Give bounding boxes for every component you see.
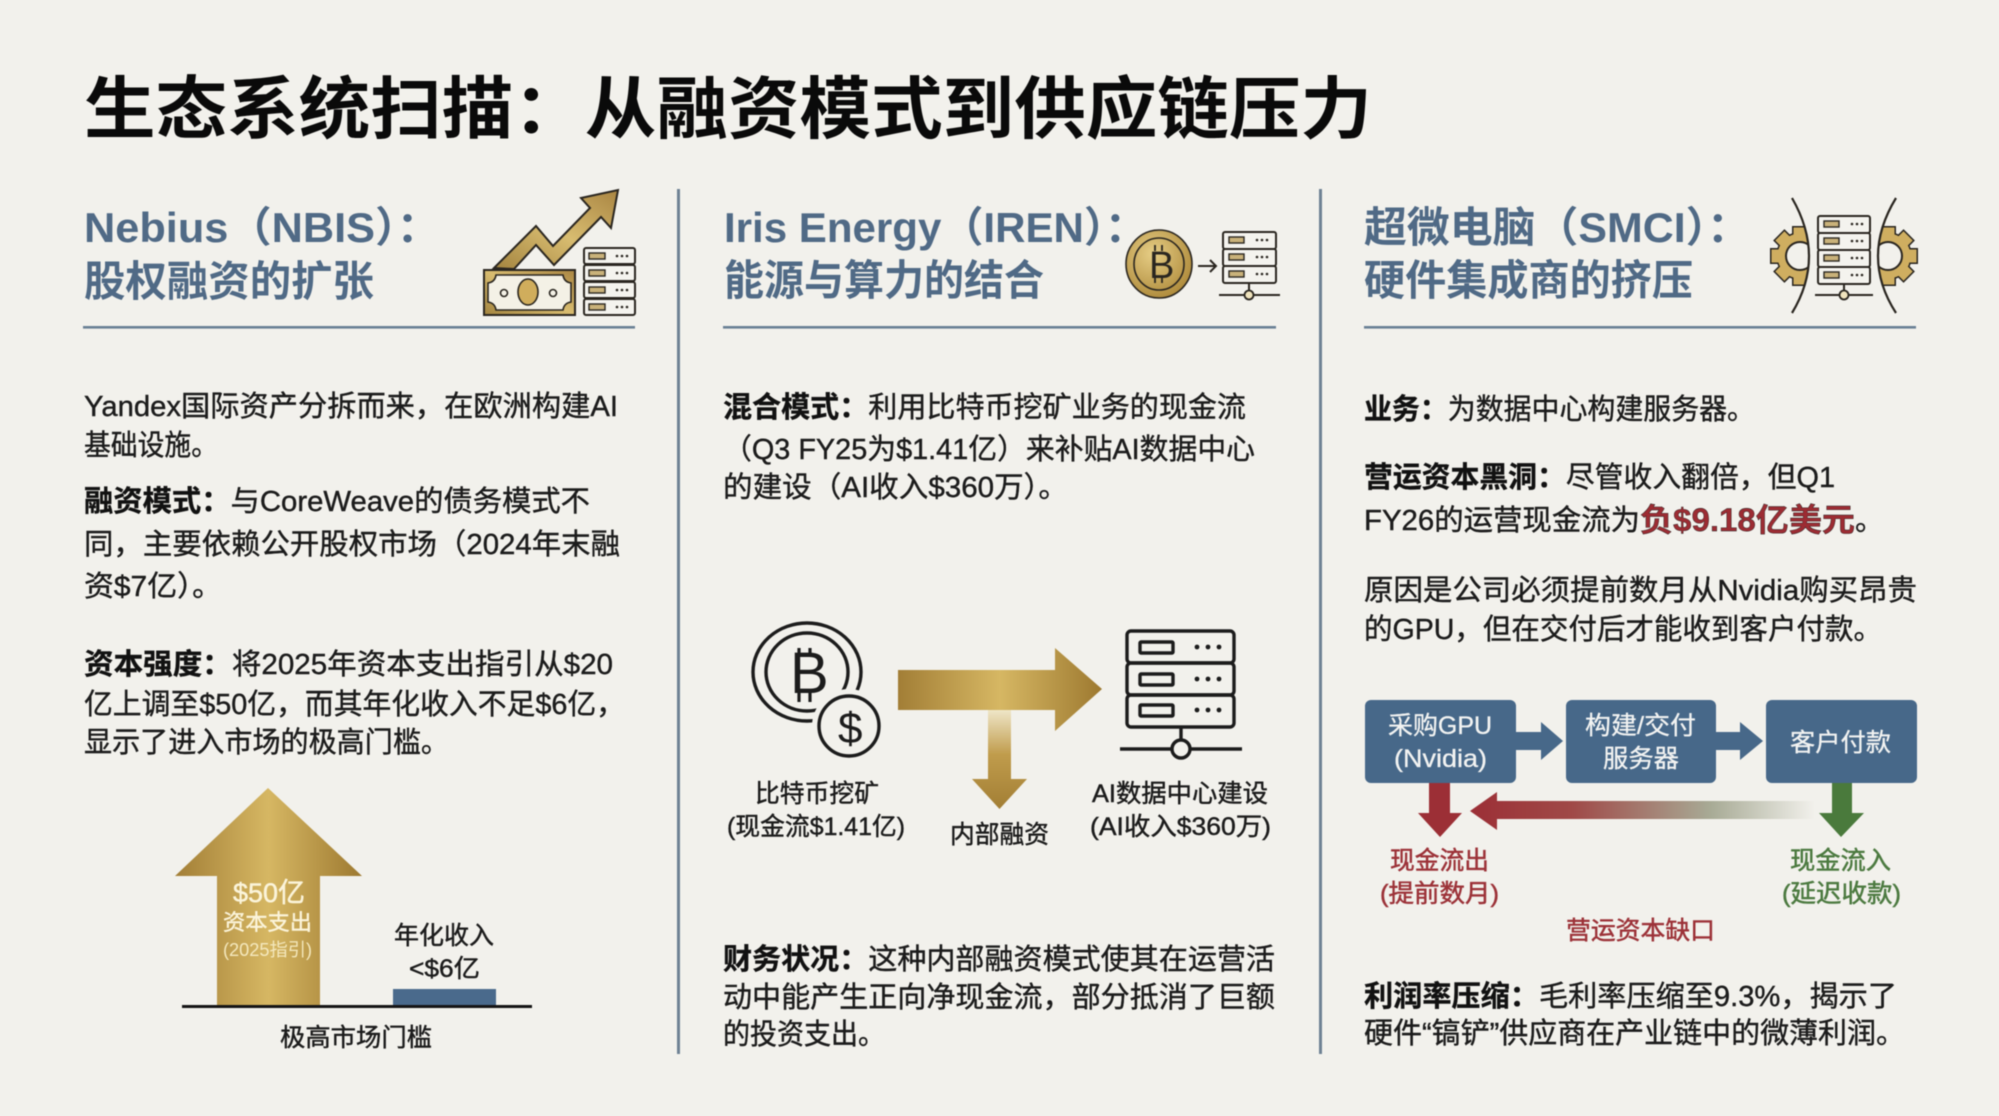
title: 生态系统扫描：从融资模式到供应链压力	[84, 72, 1372, 148]
text block: hybrid model: （Q3 FY25为$1.41亿）来补贴AI数据中心	[723, 433, 1255, 466]
arrow: internal financing down	[972, 710, 1027, 809]
arrow: step two to three	[1716, 722, 1763, 760]
panel: Iris Energy	[723, 204, 1280, 1051]
revenue bar: 年化收入	[394, 922, 494, 950]
box: build and deliver: 服务器	[1603, 745, 1679, 773]
icon: bitcoin coin to server	[1126, 230, 1280, 300]
label: cash outflow: (提前数月)	[1380, 880, 1499, 908]
text block: Super Micro body: 。	[1855, 505, 1884, 537]
text block: margin compression: 硬件“镐铲”供应商在产业链中的微薄利润。	[1364, 1017, 1905, 1050]
revenue bar: <$6亿	[409, 955, 480, 983]
capex arrow: $50亿	[233, 878, 305, 908]
highlighted figure: 负$9.18亿美元	[1640, 502, 1855, 538]
label: cash outflow	[1380, 847, 1499, 908]
text block: Super Micro body	[1364, 393, 1917, 646]
box: customer payment: 客户付款	[1790, 729, 1891, 757]
label: bitcoin mining: (现金流$1.41亿)	[727, 813, 905, 841]
text block: Nebius body	[84, 390, 625, 759]
text block: Super Micro body: 营运资本黑洞：尽管收入翻倍，但Q1	[1364, 461, 1835, 494]
icon: squeezed server with gears	[1770, 198, 1918, 313]
text block: financial status	[723, 943, 1275, 1051]
heading: Iris Energy	[724, 204, 1147, 304]
heading: Nebius	[84, 204, 440, 305]
text block: Nebius body: Yandex国际资产分拆而来，在欧洲构建AI	[84, 390, 618, 423]
text block: financial status: 动中能产生正向净现金流，部分抵消了巨额	[723, 981, 1275, 1014]
box: buy GPU: (Nvidia)	[1394, 745, 1487, 773]
capex arrow	[175, 788, 362, 1006]
arrow: gap between payment and purchase	[1470, 792, 1815, 830]
chart caption: 极高市场门槛	[280, 1024, 432, 1052]
text block: Nebius body: 亿上调至$50亿，而其年化收入不足$6亿，	[84, 688, 625, 721]
label: AI data center: (AI收入$360万)	[1090, 813, 1271, 841]
label: internal financing: 内部融资	[950, 821, 1049, 849]
icon: bitcoin coin to server: B	[1149, 245, 1174, 287]
capex arrow: (2025指引)	[223, 940, 312, 960]
text block: Nebius body: 资本强度：将2025年资本支出指引从$20	[84, 648, 613, 681]
diagram: working capital gap	[1365, 700, 1917, 945]
text block: Nebius body: 资$7亿）。	[84, 570, 222, 603]
text block: Nebius body: 同，主要依赖公开股权市场（2024年末融	[84, 528, 620, 561]
panel: Nebius	[83, 190, 635, 1052]
text block: margin compression: 利润率压缩：毛利率压缩至9.3%，揭示了	[1364, 980, 1897, 1013]
text block: financial status: 财务状况：这种内部融资模式使其在运营活	[723, 943, 1275, 976]
label: cash inflow: 现金流入	[1790, 847, 1891, 875]
text block: Super Micro body: FY26的运营现金流为	[1364, 504, 1640, 537]
diagram: internal financing flow	[727, 623, 1271, 849]
revenue bar	[393, 922, 496, 1006]
label: cash inflow	[1782, 847, 1901, 908]
icon: bitcoin and dollar: $	[838, 704, 862, 753]
panel: Super Micro	[1364, 198, 1918, 1050]
box: customer payment	[1766, 700, 1917, 783]
text block: Super Micro body: 的GPU，但在交付后才能收到客户付款。	[1364, 613, 1882, 646]
arrow: cash inflow	[1819, 783, 1864, 837]
box: build and deliver: 构建/交付	[1585, 712, 1696, 740]
label: AI data center: AI数据中心建设	[1092, 780, 1268, 808]
arrow: cash flow to data center	[898, 648, 1102, 731]
label: AI data center	[1090, 780, 1271, 841]
box: build and deliver	[1566, 700, 1716, 783]
text block: hybrid model: 的建设（AI收入$360万）。	[723, 471, 1068, 504]
icon: bitcoin and dollar: B	[790, 641, 829, 706]
label: working capital gap: 营运资本缺口	[1566, 917, 1715, 945]
icon: money, growth arrow and server	[484, 190, 635, 315]
heading: Nebius: 股权融资的扩张	[84, 258, 374, 305]
text block: Nebius body: 显示了进入市场的极高门槛。	[84, 726, 449, 759]
label: bitcoin mining: 比特币挖矿	[755, 780, 879, 808]
heading: Super Micro: 硬件集成商的挤压	[1364, 257, 1693, 304]
text block: Nebius body: 融资模式：与CoreWeave的债务模式不	[84, 485, 590, 518]
label: cash inflow: (延迟收款)	[1782, 880, 1901, 908]
capex arrow: 资本支出	[223, 910, 312, 935]
text block: Super Micro body: 原因是公司必须提前数月从Nvidia购买昂贵	[1364, 574, 1917, 607]
heading: Nebius: Nebius（NBIS）：	[84, 204, 440, 251]
heading: Iris Energy: Iris Energy（IREN）：	[724, 204, 1147, 251]
text block: hybrid model: 混合模式：利用比特币挖矿业务的现金流	[723, 391, 1246, 424]
label: cash outflow: 现金流出	[1390, 847, 1489, 875]
heading: Iris Energy: 能源与算力的结合	[724, 257, 1044, 304]
text block: Super Micro body: 业务：为数据中心构建服务器。	[1364, 393, 1755, 426]
icon: bitcoin and dollar	[753, 623, 886, 763]
text block: financial status: 的投资支出。	[723, 1018, 885, 1051]
heading: Super Micro	[1364, 204, 1750, 304]
arrow: cash outflow	[1418, 783, 1462, 837]
text block: margin compression	[1364, 980, 1905, 1050]
text block: Nebius body: 基础设施。	[84, 429, 218, 462]
box: buy GPU: 采购GPU	[1388, 712, 1492, 740]
icon: data center server	[1120, 631, 1242, 758]
box: buy GPU	[1365, 700, 1516, 783]
heading: Super Micro: 超微电脑（SMCI）：	[1364, 204, 1750, 251]
label: bitcoin mining	[727, 780, 905, 841]
chart: capex versus revenue	[175, 788, 532, 1052]
text block: hybrid model	[723, 391, 1255, 504]
arrow: step one to two	[1516, 722, 1563, 760]
